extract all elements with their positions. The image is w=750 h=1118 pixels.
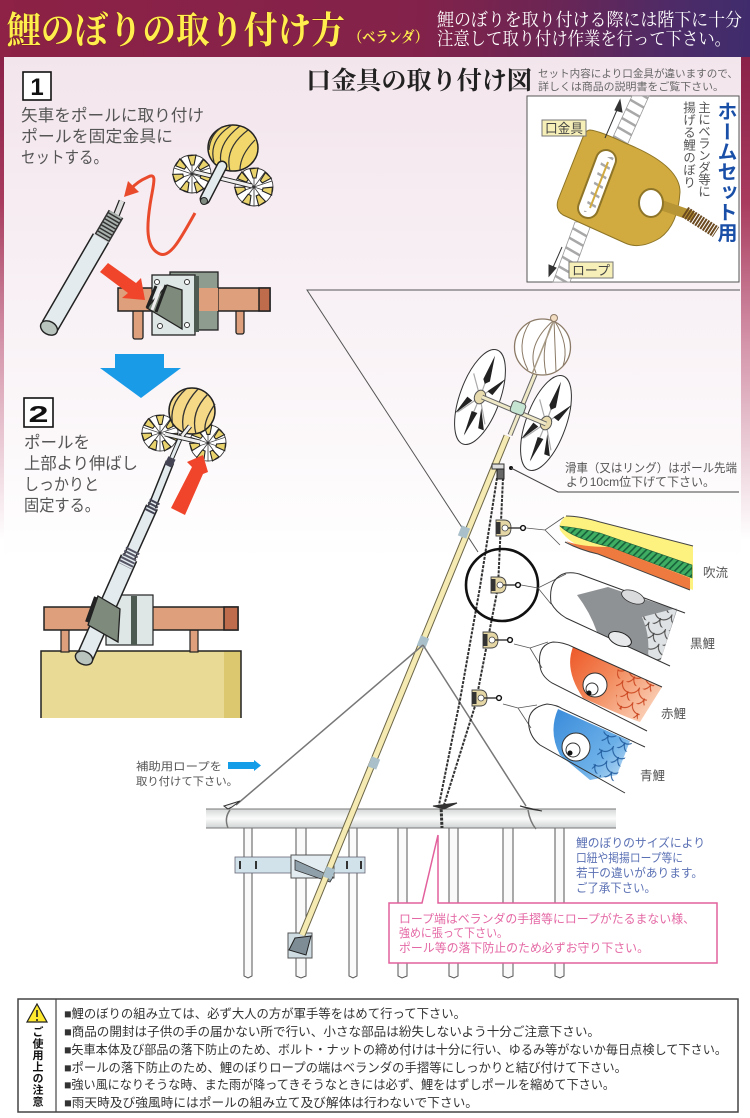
direction arrows [549, 100, 622, 276]
caution list: ■強い風になりそうな時、また雨が降ってきそうなときには必ず、鯉をはずしポールを縮めて下さい。 [64, 1077, 615, 1092]
step 1 text: ポールを固定金具に [21, 127, 173, 146]
blue arrow: helper rope [228, 760, 261, 771]
step 2 text: ポールを [24, 433, 90, 452]
fitting plate [557, 130, 680, 246]
panel: usage cautions [18, 999, 738, 1112]
step 2 text: しっかりと [24, 476, 99, 494]
support ropes [226, 645, 536, 829]
veranda note: 主にベランダ等に [696, 101, 710, 197]
icon: pinwheel and ball (step 1) [173, 125, 273, 206]
caution list: ■鯉のぼりの組み立ては、必ず大人の方が軍手等をはめて行って下さい。 [64, 1006, 466, 1021]
step 1 text [21, 106, 204, 167]
pink callout: ロープ端はベランダの手摺等にロープがたるまない様、 [399, 912, 695, 926]
caution list: ■商品の開封は子供の手の届かない所で行い、小さな部品は紛失しないよう十分ご注意下さい。 [64, 1024, 600, 1039]
label: rope: ロープ [572, 263, 610, 278]
step 1 badge [23, 72, 51, 101]
helper rope note: 取り付けて下さい。 [136, 775, 238, 788]
slot [584, 157, 614, 212]
step 1 badge: 1 [30, 74, 44, 101]
heading: mouth fitting diagram: 口金具の取り付け図 [306, 67, 532, 95]
detail callout lines [307, 290, 740, 552]
step 1 text: セットする。 [21, 149, 108, 167]
koi: blue [503, 704, 645, 793]
label: blue koi: 青鯉 [640, 769, 666, 783]
label: red koi: 赤鯉 [661, 707, 687, 721]
caution list: ■矢車本体及び部品の落下防止のため、ボルト・ナットの締め付けは十分に行い、ゆるみ等がないか毎日点検して下さい。 [64, 1042, 727, 1057]
red arrow (step 2) [171, 455, 208, 515]
main pole [302, 436, 507, 935]
step 2 badge: 2 [28, 401, 48, 427]
pink callout [389, 835, 717, 963]
label: fitting: 口金具 [545, 121, 583, 136]
koi: black [521, 573, 685, 666]
size note: 鯉のぼりのサイズにより [576, 836, 705, 850]
header band [0, 0, 750, 57]
pink callout: ポール等の落下防止のため必ずお守り下さい。 [399, 941, 649, 955]
label: black koi: 黒鯉 [690, 637, 716, 651]
veranda note: 揚げる鯉のぼり [681, 100, 695, 188]
icon: warning triangle [27, 1004, 47, 1022]
title: 鯉のぼりの取り付け方 [7, 10, 345, 52]
rope [553, 96, 649, 282]
pole bracket [235, 855, 365, 958]
step 2 text: 固定する。 [24, 496, 100, 515]
veranda note [681, 100, 710, 197]
size note: 口紐や掲揚ロープ等に [576, 851, 683, 865]
icon: pinwheel and ball (step 2) [142, 388, 226, 461]
pink callout: 強めに張って下さい。 [399, 926, 508, 940]
size note: 若干の違いがあります。 [576, 866, 703, 880]
caution heading: ご使用上の注意 [31, 1025, 44, 1107]
helper rope note [136, 759, 238, 788]
home set label: ホームセット用 [714, 101, 737, 243]
caution list: ■ポールの落下防止のため、鯉のぼりロープの端はベランダの手摺等にしっかりと結び付けて下さい。 [64, 1060, 627, 1075]
pulley note leader [509, 466, 739, 492]
step 2 badge [24, 398, 53, 427]
hook [639, 189, 716, 232]
pulley [492, 464, 504, 479]
detail circle [466, 549, 538, 621]
fitting note: セット内容により口金具が違いますので、 [538, 67, 738, 80]
red arrow (step 1) [100, 263, 145, 300]
red curved arrow [124, 176, 195, 255]
koi: streamer [526, 516, 693, 590]
chains [439, 478, 503, 828]
telescopic pole (step 2) [73, 434, 182, 668]
rope ties [224, 801, 542, 811]
pulley note [565, 461, 737, 489]
fitting note: 詳しくは商品の説明書をご覧下さい。 [538, 80, 724, 93]
label: streamer: 吹流 [703, 566, 729, 580]
rail and bracket (step 2) [44, 595, 238, 652]
rail and bracket (step 1) [118, 272, 270, 339]
fitting note [538, 67, 738, 93]
railing [206, 809, 616, 978]
fabric cover [41, 651, 241, 718]
title suffix: （ベランダ） [349, 28, 428, 46]
step 1 text: 矢車をポールに取り付け [21, 106, 204, 125]
pulley note: 滑車（又はリング）はポール先端 [565, 461, 737, 475]
step 2 text: 上部より伸ばし [24, 454, 138, 473]
step 2 text [24, 433, 138, 515]
clasps [472, 520, 525, 706]
size note [576, 836, 705, 895]
helper rope note: 補助用ロープを [136, 759, 222, 773]
telescopic pole (step 1) [38, 201, 122, 338]
windwheels and ball top [444, 314, 582, 477]
pulley note: より10cm位下げて下さい。 [566, 475, 715, 489]
panel: mouth fitting inset [527, 96, 739, 282]
size note: ご了承下さい。 [576, 881, 656, 895]
blue down arrow [100, 354, 181, 398]
koi: red [514, 642, 662, 731]
caution list: ■雨天時及び強風時にはポールの組み立て及び解体は行わないで下さい。 [64, 1096, 478, 1110]
caution list [64, 1006, 727, 1110]
